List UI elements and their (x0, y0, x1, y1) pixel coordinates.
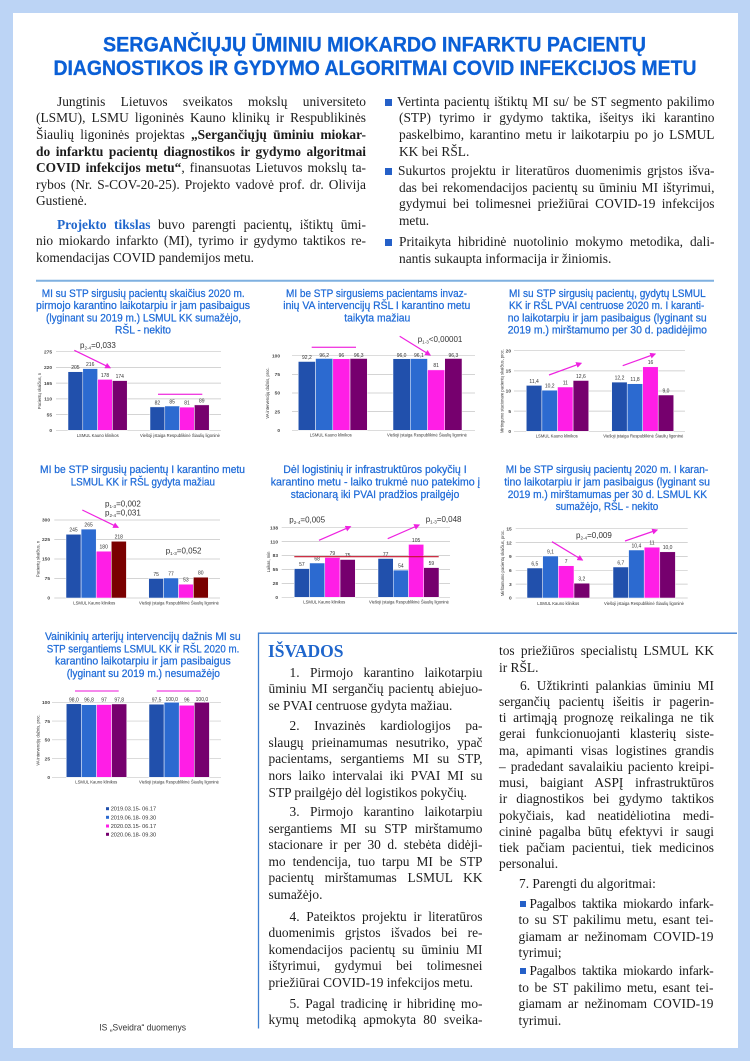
title (54, 32, 696, 80)
chart 2: invasive interventions MI be STP: Viešoji įstaiga Respublikinė Šiaulių ligoninė (387, 432, 468, 438)
algorithm bullet 2: to be ST pakilimo metu, esant tei- (518, 980, 714, 995)
chart 2 title (283, 288, 470, 324)
algorithm bullet 2: giamam ar nežinomam COVID-19 (518, 996, 714, 1011)
chart 7: coronary interventions frequency: 97,8 (114, 697, 124, 703)
chart 1: MI su STP patients count: 110 (44, 397, 52, 403)
chart 7: coronary interventions frequency: LSMUL Kauno klinikos (75, 779, 117, 784)
chart 5: time from admission to PCI: 110 (270, 539, 278, 545)
chart 4 bars (66, 529, 208, 598)
conclusion 5 continued: tos priežiūros specialistų LSMUL KK (499, 643, 714, 658)
conclusion 6: musi, baigiant ASPĮ infrastruktūros (499, 775, 714, 790)
chart 2 p value: p (418, 335, 422, 344)
chart 1: MI su STP patients count: 205 (71, 365, 80, 371)
chart 6: MI be STP mortality: 6,5 (531, 561, 538, 567)
bullet 3 (385, 234, 714, 266)
chart 2: invasive interventions MI be STP: 96,3 (354, 353, 364, 359)
title: DIAGNOSTIKOS IR GYDYMO ALGORITMAI COVID INFEKCIJOS METU (54, 57, 696, 80)
bullet 1: paskelbimo, karantino metu ir laikotarpiu po jo LSMUL (399, 127, 714, 142)
chart 6: MI be STP mortality: 12 (506, 540, 512, 546)
chart 4: MI be STP patients treated: 225 (42, 537, 50, 543)
conclusion 5 continued (499, 643, 714, 675)
chart 4 title (40, 464, 245, 488)
chart 4 arrow (82, 510, 118, 527)
bullet 1: Vertinta pacientų ištiktų MI su/ be ST segmento pakilimo (397, 94, 714, 109)
chart 3: MI su STP mortality: 9,0 (663, 388, 670, 394)
chart 5: time from admission to PCI: LSMUL Kauno klinikos (303, 600, 345, 604)
chart 1 p value: =0,033 (91, 341, 116, 350)
chart 3 title: 2019 m.) mirštamumo per 30 d. padidėjimo (508, 325, 707, 337)
chart 2: invasive interventions MI be STP: 96,2 (319, 353, 329, 359)
chart 6: MI be STP mortality: 0 (509, 596, 512, 602)
conclusion 4: duomenimis grįstos išvados bei re- (268, 925, 482, 940)
chart 5: time from admission to PCI (266, 464, 480, 604)
bullet 2: gydymui bei tolimesnei priežiūrai COVID-19 infekcijos (399, 196, 714, 211)
chart 2: invasive interventions MI be STP: 50 (275, 391, 280, 397)
chart 4: MI be STP patients treated: 53 (183, 578, 189, 584)
chart 2: invasive interventions MI be STP: VA intervencijų dažnis, proc. (265, 367, 270, 419)
chart 5 p values: p (426, 515, 430, 524)
chart 5 p values: p (289, 516, 294, 525)
intro text: do infarktu pacientų diagnostikos ir gydymo algoritmai (36, 144, 366, 159)
chart 6: MI be STP mortality: 15 (506, 526, 512, 532)
chart 6: MI be STP mortality: Mirštamumo pacientų skaičius, proc. (500, 530, 505, 596)
bullet 2: Sukurtos projektu ir literatūros duomenimis grįstos išva- (398, 163, 714, 178)
bullet 2: das bei rekomendacijos pacientų su ūminiu MI ištyrimui, (399, 180, 714, 195)
bullet 1 (385, 94, 714, 159)
conclusion 3: pacientų mirštamumas LSMUL KK (268, 870, 482, 885)
conclusion 4: 4. Pateiktos projektu ir literatūros (290, 908, 482, 924)
chart 2: invasive interventions MI be STP: 75 (275, 372, 280, 378)
chart 5: time from admission to PCI: 0 (275, 595, 278, 601)
chart 4: MI be STP patients treated: 300 (42, 518, 50, 524)
conclusion 3: stacionare ir per 30 d. stebėta didėji- (268, 837, 482, 852)
chart 7 title (45, 631, 241, 680)
chart 6 bars (527, 547, 675, 598)
algorithm bullet 1: Pagalbos taktika miokardo infark- (530, 896, 714, 910)
chart 6: MI be STP mortality: 11 (649, 541, 655, 547)
chart 5: time from admission to PCI: Laikas, min (266, 551, 271, 572)
chart 3: MI su STP mortality: Mirtingumo stacionare pacientų skaičius, proc. (500, 349, 504, 433)
chart 4: MI be STP patients treated (36, 464, 245, 606)
conclusion 6: gerai funkcionuojanti klasterių siste- (499, 726, 714, 741)
chart 4: MI be STP patients treated: 150 (42, 557, 50, 563)
chart 2 p value: 1-3 (422, 340, 429, 344)
chart 4 p values: 1-3 (109, 504, 117, 509)
chart 4: MI be STP patients treated: 0 (47, 596, 50, 602)
bullet 3: Pritaikyta hibridinė nuotolinio mokymo metodika, dali- (399, 234, 714, 249)
conclusion 2: pacientams, sergantiems MI su STP, (268, 751, 482, 766)
chart 5: time from admission to PCI: 28 (273, 581, 278, 587)
conclusion 6: 6. Užtikrinti palankias ūminiu MI (520, 678, 714, 692)
chart 5: time from admission to PCI: 77 (383, 552, 389, 558)
chart 6 title: tino laikotarpiu ir jam pasibaigus (lyginant su (504, 476, 710, 488)
algorithm bullet 1 (518, 896, 714, 960)
chart 3 title (508, 288, 707, 337)
chart 3: MI su STP mortality: 15 (506, 368, 511, 374)
chart 5 p values: =0,048 (437, 515, 462, 524)
chart 3: MI su STP mortality: 10 (506, 389, 511, 395)
chart 1: MI su STP patients count: 174 (116, 374, 124, 380)
chart 4 p values: =0,052 (177, 546, 202, 555)
chart 7: coronary interventions frequency: 97,5 (152, 697, 162, 703)
conclusion 2: slaugų prieinamumas nesutriko, ypač (268, 735, 482, 750)
chart 2: invasive interventions MI be STP: 96,3 (449, 353, 458, 359)
legend (106, 807, 156, 838)
chart 4: MI be STP patients treated: 75 (45, 576, 50, 582)
chart 7: coronary interventions frequency: VA intervencijų dažnis, proc. (36, 714, 40, 766)
chart 2 p value: <0,00001 (429, 335, 463, 344)
conclusion 6 (498, 678, 714, 871)
chart 3: MI su STP mortality: 11,4 (529, 379, 539, 385)
algorithm bullet 2: tyrimui. (518, 1013, 561, 1028)
chart 4 p values: 2-4 (109, 513, 117, 518)
chart 2: invasive interventions MI be STP: 96 (339, 353, 344, 359)
chart 4 title: LSMUL KK ir RŠL gydyta mažiau (71, 476, 215, 488)
chart 3 title: no laikotarpiu ir jam pasibaigus (lyginant su (508, 312, 707, 324)
conclusion 5: 5. Pagal tradicinę ir hibridinę mo- (290, 996, 482, 1011)
conclusion 4: priežiūrai COVID-19 infekcijos metu. (268, 975, 473, 990)
chart 3 title: MI su STP sirgusių pacientų, gydytų LSMUL (509, 288, 706, 300)
chart 7 title: (lyginant su 2019 m.) nesumažėjo (67, 668, 220, 680)
chart 6 title: sumažėjo, RŠL - nekito (556, 500, 658, 513)
conclusion 2: 2. Invazinės kardiologijos pa- (290, 718, 482, 733)
algorithm bullet 1: to su ST pakilimu metu, esant tei- (518, 912, 714, 927)
chart 5 p values (289, 515, 462, 525)
chart 7: coronary interventions frequency: 98,0 (69, 697, 79, 703)
conclusion 6: ma, apimanti visas logistines grandis (499, 743, 714, 758)
chart 3: MI su STP mortality: 10,2 (545, 384, 555, 390)
chart 4 title: MI be STP sirgusių pacientų I karantino metu (40, 464, 245, 476)
conclusion 6: ir diagnostikos bei gydymo taktikos (499, 791, 714, 806)
chart 5: time from admission to PCI: 83 (273, 553, 278, 559)
conclusion 4: ištyrimui, gydymui bei tolimesnei (268, 958, 482, 973)
chart 1 bars (68, 369, 209, 430)
chart 1 title: MI su STP sirgusių pacientų skaičius 2020 m. (42, 288, 245, 300)
chart 4 p values: p (105, 500, 109, 509)
chart 2 title: MI be STP sirgusiems pacientams invaz- (286, 288, 467, 300)
project aim (36, 217, 366, 265)
chart 7: coronary interventions frequency: 100,0 (196, 697, 208, 703)
bullet 1: KK bei RŠL. (399, 144, 469, 159)
chart 3: MI su STP mortality: 0 (508, 429, 511, 435)
chart 1: MI su STP patients count: 81 (184, 400, 190, 406)
chart 5: time from admission to PCI: 68 (314, 556, 320, 562)
chart 6 title: MI be STP sirgusių pacientų 2020 m. I karan- (506, 464, 709, 476)
intro text: (LSMU), LSMU ligoninės Kauno klinikų ir Respublikinės (36, 110, 366, 125)
chart 5 p values: 1-3 (430, 520, 437, 524)
conclusion 3 (268, 804, 482, 902)
chart 7 title: Vainikinių arterijų intervencijų dažnis MI su (45, 631, 241, 643)
chart 1: MI su STP patients count: Viešoji įstaiga Respublikinė Šiaulių ligoninė (140, 433, 221, 438)
chart 7: coronary interventions frequency: 0 (47, 775, 50, 781)
chart 3: MI su STP mortality: Viešoji įstaiga Respublikinė Šiaulių ligoninė (603, 434, 684, 438)
chart 1: MI su STP patients count: LSMUL Kauno klinikos (77, 433, 119, 438)
source note: IS „Sveidra“ duomenys (99, 1022, 187, 1032)
chart 1: MI su STP patients count: Pacientų skaičius, n (37, 372, 42, 409)
chart 6: MI be STP mortality: 10,4 (632, 543, 641, 549)
chart 3: MI su STP mortality: 12,6 (576, 374, 586, 380)
conclusion 2: STP prailgėjo dėl logistikos pokyčių. (268, 785, 467, 800)
chart 1 p value: p (80, 341, 84, 350)
chart 2: invasive interventions MI be STP: 100 (272, 353, 280, 359)
conclusion 6: personalui. (499, 856, 558, 871)
chart 1: MI su STP patients count: 0 (49, 428, 52, 434)
chart 4: MI be STP patients treated: 245 (69, 528, 78, 534)
chart 2 title: taikyta mažiau (344, 312, 410, 324)
project aim: Projekto tikslas buvo parengti pacientų, ištiktų ūmi- (57, 217, 366, 232)
chart 2: invasive interventions MI be STP: 81 (433, 363, 439, 369)
chart 1: MI su STP patients count: 165 (44, 381, 52, 387)
chart 1 title: (lyginant su 2019 m.) LSMUL KK sumažėjo, (46, 312, 241, 324)
chart 4: MI be STP patients treated: 80 (198, 571, 204, 577)
bullet 3: nantis sukaupta informacija ir žiniomis. (399, 251, 611, 266)
chart 5: time from admission to PCI: 55 (273, 567, 278, 573)
chart 4 p values: 1-3 (170, 551, 177, 556)
chart 4: MI be STP patients treated: Pacientų skaičius, n (36, 540, 40, 577)
chart 7: coronary interventions frequency (36, 631, 241, 838)
chart 5 bars (294, 544, 439, 597)
chart 1: MI su STP patients count (36, 288, 250, 438)
chart 7: coronary interventions frequency: 97 (101, 697, 107, 703)
chart 4 p values (105, 500, 202, 556)
chart 4: MI be STP patients treated: 75 (153, 572, 159, 578)
chart 4: MI be STP patients treated: 77 (168, 571, 174, 577)
intro text: COVID infekcijos metu“, finansuotas Lietuvos mokslų ta- (36, 160, 366, 175)
conclusion 3: sergantiems MI su STP mirštamumo (268, 821, 482, 836)
conclusion 7: 7. Parengti du algoritmai: (519, 876, 656, 890)
chart 4 p values: p (166, 546, 170, 555)
conclusion 6: sergančių pacientų išeitis ir pagerin- (499, 694, 714, 709)
chart 4 p values: p (105, 509, 109, 518)
algorithm bullet 1: giamam ar nežinomam COVID-19 (518, 929, 714, 944)
chart 7: coronary interventions frequency: Viešoji įstaiga Respublikinė Šiaulių ligoninė (139, 779, 220, 784)
chart 3: MI su STP mortality: LSMUL Kauno klinikos (536, 434, 578, 438)
conclusion 3: sumažėjo. (268, 887, 322, 902)
chart 1 p value: 2-4 (84, 346, 92, 350)
chart 3: MI su STP mortality: 11 (563, 380, 568, 386)
conclusion 1 (268, 665, 482, 713)
chart 4: MI be STP patients treated: 218 (115, 535, 123, 541)
intro text: Gustienė. (36, 193, 87, 208)
chart 7: coronary interventions frequency: 100,0 (165, 697, 178, 703)
chart 2: invasive interventions MI be STP: 96,0 (397, 353, 407, 359)
chart 3 arrows (549, 354, 655, 375)
chart 6: MI be STP mortality: Viešoji įstaiga Respublikinė Šiaulių ligoninė (604, 601, 685, 606)
intro text: rybos (Nr. S-COV-20-25). Projekto vadovė prof. dr. Olivija (36, 177, 366, 192)
chart 3: MI su STP mortality: 5 (508, 409, 511, 415)
chart 5 title: Dėl logistinių ir infrastruktūros pokyčių I (283, 464, 467, 476)
chart 2 title: inių VA intervencijų RŠL I karantino metu (283, 299, 470, 312)
chart 5: time from admission to PCI: 54 (398, 564, 404, 570)
chart 7 title: STP sergantiems LSMUL KK ir RŠL 2020 m. (47, 642, 239, 655)
conclusion 3: 3. Pirmojo karantino laikotarpiu (290, 804, 482, 819)
chart 7: coronary interventions frequency: 100 (42, 700, 50, 706)
conclusion 2: nors laiko intervalai iki PVAI MI su (268, 768, 482, 783)
legend: 2019.03.15- 06.17 (111, 807, 156, 813)
chart 2: invasive interventions MI be STP (265, 288, 475, 438)
chart 1 title: RŠL - nekito (115, 324, 171, 337)
chart 6: MI be STP mortality: 10,0 (663, 545, 673, 551)
conclusion 3: mo tendencija, tuo tarpu MI be STP (268, 854, 482, 869)
chart 5: time from admission to PCI: 138 (270, 525, 278, 531)
project aim: nio miokardo infarkto (MI), tyrimo ir gydymo taktikos re- (36, 233, 366, 248)
chart 3: MI su STP mortality: 16 (648, 360, 653, 366)
chart 3: MI su STP mortality: 11,8 (630, 377, 640, 383)
project aim: komendacijas COVID pandemijos metu. (36, 250, 254, 265)
chart 2 bars (298, 358, 462, 430)
chart 2: invasive interventions MI be STP: 25 (275, 409, 280, 415)
chart 5 p values: 2-4 (294, 520, 301, 525)
chart 2: invasive interventions MI be STP: 96,1 (414, 353, 424, 359)
chart 5: time from admission to PCI: 59 (429, 561, 434, 567)
legend: 2020.06.18- 09.30 (111, 832, 156, 838)
conclusion 1: ūminiu MI sergančių pacientų abiejuo- (268, 681, 482, 696)
conclusion 5 (268, 996, 482, 1027)
legend: 2019.06.18- 09.30 (111, 815, 156, 821)
chart 5 p values: =0,005 (300, 516, 326, 525)
chart 6: MI be STP mortality: 9 (509, 554, 512, 560)
chart 6 p value: 2-4 (580, 536, 588, 540)
chart 7: coronary interventions frequency: 50 (45, 738, 50, 744)
chart 1: MI su STP patients count: 55 (47, 412, 52, 418)
chart 7: coronary interventions frequency: 96 (184, 697, 190, 703)
conclusions heading: IŠVADOS (268, 640, 344, 661)
algorithm bullet 2: Pagalbos taktika miokardo infark- (530, 963, 714, 978)
chart 4: MI be STP patients treated: Viešoji įstaiga Respublikinė Šiaulių ligoninė (139, 600, 220, 606)
chart 2: invasive interventions MI be STP: 0 (277, 428, 280, 434)
chart 6: MI be STP mortality: 9,1 (547, 549, 554, 555)
chart 4: MI be STP patients treated: 180 (100, 545, 108, 551)
conclusion 5: kymų metodiką apmokyta 80 sveika- (268, 1012, 482, 1027)
chart 1: MI su STP patients count: 85 (169, 399, 175, 405)
chart 6 title: 2019 m.) mirštamumas per 30 d. LSMUL KK (508, 489, 707, 501)
chart 5: time from admission to PCI: 57 (299, 562, 305, 568)
chart 1: MI su STP patients count: 89 (199, 398, 205, 404)
chart 6 arrows (552, 530, 657, 560)
intro text: Jungtinis Lietuvos sveikatos mokslų universiteto (57, 94, 366, 109)
chart 5: time from admission to PCI: Viešoji įstaiga Respublikinė Šiaulių ligoninė (369, 600, 450, 604)
chart 6: MI be STP mortality: 6,7 (617, 560, 624, 566)
conclusion 2 (268, 718, 482, 800)
chart 2: invasive interventions MI be STP: 92,2 (302, 355, 312, 361)
conclusion 6: ti artimąją prognozę reikalinga ne tik (499, 710, 714, 725)
conclusion 6: tiek pačiam pacientui, tiek medicinos (499, 840, 714, 855)
chart 5: time from admission to PCI: 79 (330, 551, 335, 557)
chart 7: coronary interventions frequency: 75 (45, 719, 50, 725)
chart 1: MI su STP patients count: 275 (44, 349, 52, 355)
chart 1: MI su STP patients count: 178 (101, 373, 109, 379)
chart 1: MI su STP patients count: 220 (44, 365, 52, 371)
chart 1 arrow (74, 350, 110, 368)
chart 6 p value: p (576, 531, 580, 540)
chart 5 title (271, 464, 480, 501)
chart 2 arrow (400, 336, 430, 355)
legend: 2020.03.15- 06.17 (111, 824, 156, 830)
bullet 2: metu. (399, 213, 429, 228)
chart 1: MI su STP patients count: 82 (155, 400, 160, 406)
chart 3: MI su STP mortality (500, 288, 707, 438)
chart 1 title: pirmojo karantino laikotarpiu ir jam pasibaigus (36, 300, 250, 312)
chart 3 bars (526, 367, 674, 431)
conclusion 6: pokyčiais, kad neatidėliotina medi- (499, 808, 714, 823)
chart 5: time from admission to PCI: 105 (412, 538, 420, 544)
chart 6 p value: =0,009 (587, 531, 612, 540)
chart 2: invasive interventions MI be STP: LSMUL Kauno klinikos (310, 432, 352, 438)
chart 3 title: KK ir RŠL PVAI centruose 2020 m. I karanti- (509, 299, 705, 312)
chart 6: MI be STP mortality (500, 464, 710, 606)
conclusion 6: – pradedant savalaikiu paciento kreipi- (499, 759, 714, 774)
chart 4: MI be STP patients treated: 265 (84, 522, 93, 528)
algorithm bullet 2 (518, 963, 714, 1028)
conclusion 4: komendacijos pacientų su ūminiu MI (268, 942, 482, 957)
chart 7 bars (66, 702, 209, 777)
algorithm bullet 1: tyrimui; (518, 945, 562, 960)
bullet 1: (STP) tyrimo ir gydymo taktika, išeitys iki karantino (399, 110, 714, 125)
conclusion 1: se PVAI centruose gydyta mažiau. (268, 698, 452, 713)
chart 5 title: karantino metu - laiko trukmė nuo patekimo į (271, 476, 480, 488)
conclusion 6: cininė pagalba būtų efektyvi ir saugi (499, 824, 714, 839)
chart 4 p values: =0,002 (116, 500, 141, 509)
chart 6: MI be STP mortality: 7 (565, 559, 568, 565)
chart 3: MI su STP mortality: 20 (506, 348, 511, 354)
chart 1 title (36, 288, 250, 337)
bullet 2 (385, 163, 714, 228)
conclusions frame (258, 633, 737, 1028)
conclusion 5 continued: ir RŠL. (499, 660, 538, 675)
chart 7: coronary interventions frequency: 96,8 (84, 697, 94, 703)
chart 5: time from admission to PCI: 75 (345, 553, 351, 559)
chart 3: MI su STP mortality: 12,2 (615, 376, 625, 382)
chart 6: MI be STP mortality: 6 (509, 568, 512, 574)
chart 5 arrows (319, 525, 419, 540)
chart 1: MI su STP patients count: 216 (86, 362, 95, 368)
chart 4 p values: =0,031 (116, 509, 141, 518)
intro text: Šiaulių ligoninės projektas „Sergančiųjų ūminiu miokar- (36, 127, 366, 142)
chart 4: MI be STP patients treated: LSMUL Kauno klinikos (73, 600, 115, 606)
chart 6: MI be STP mortality: 3,2 (578, 577, 585, 583)
chart 7 title: karantino laikotarpiu ir jam pasibaigus (55, 656, 231, 668)
chart 6: MI be STP mortality: LSMUL Kauno klinikos (537, 601, 579, 606)
chart 6: MI be STP mortality: 3 (509, 582, 512, 588)
intro text (36, 94, 366, 208)
chart 7: coronary interventions frequency: 25 (45, 756, 50, 762)
title: SERGANČIŲJŲ ŪMINIU MIOKARDO INFARKTU PACIENTŲ (103, 32, 646, 56)
chart 6 title (504, 464, 710, 513)
chart 5 title: stacionarą iki PVAI pradžios prailgėjo (291, 489, 459, 501)
conclusion 1: 1. Pirmojo karantino laikotarpiu (290, 665, 482, 680)
conclusion 4 (268, 908, 482, 990)
